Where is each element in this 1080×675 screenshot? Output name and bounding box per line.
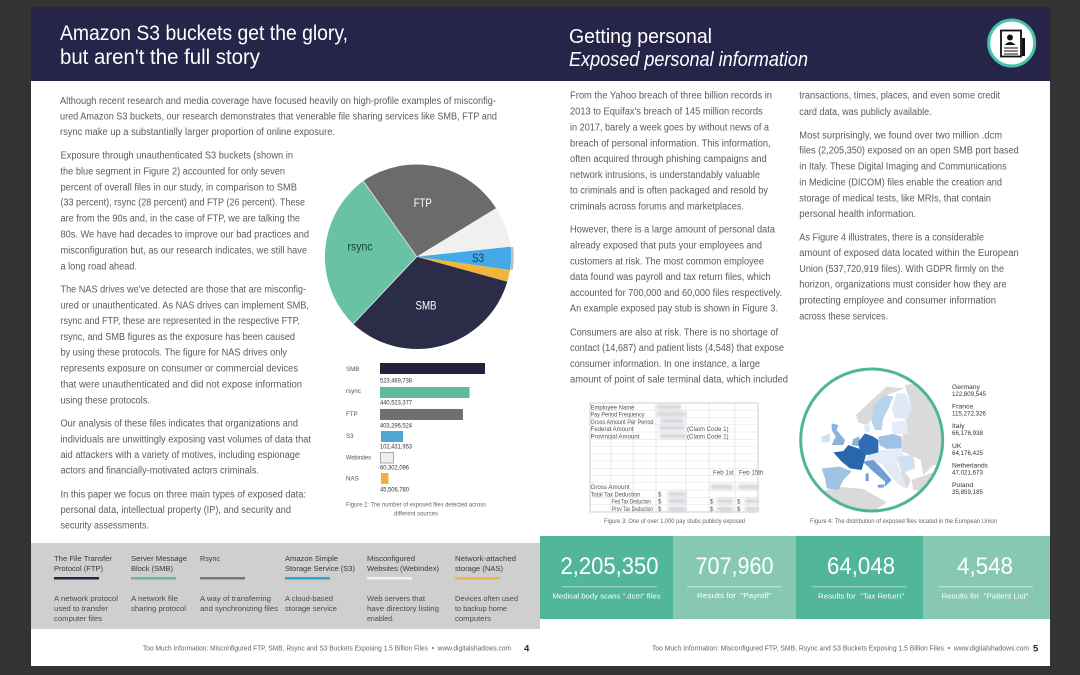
stat: tax return [796, 536, 923, 619]
figure 2 caption [346, 502, 486, 518]
glossary: SMB: Block (SMB) [131, 564, 173, 573]
right page column 2, paragraph 3: Union (537,720,919 files). With GDPR firmly on the [799, 264, 1004, 275]
paragraph: S3 exposure: are from the 90s and, in the case of FTP, we are talking the [60, 214, 301, 225]
paragraph: S3 exposure: a long road ahead. [60, 261, 137, 272]
map legend: UK [952, 443, 962, 450]
paragraph: NAS drives: using these protocols. [60, 395, 150, 406]
table labels: $ [737, 498, 741, 506]
bar chart: number of exposed files: 45,506,780 [380, 486, 410, 494]
right page column 2, paragraph 2: personal health information. [799, 209, 916, 220]
glossary: WebIndex: enabled. [367, 614, 394, 623]
table labels: $ [737, 506, 741, 513]
footer left: Too Much Information: Misconfigured FTP, SMB, Rsync and S3 Buckets Exposing 1.5 Billion Files • www.digitalshadows.com [143, 646, 511, 652]
glossary: S3: storage service [285, 604, 337, 613]
paragraph: NAS drives: that were unauthenticated and did not expose information [60, 379, 302, 390]
table labels: Feb 1st [713, 470, 734, 476]
left heading: Amazon S3 buckets get the glory, [60, 22, 348, 45]
paragraph: S3 exposure [60, 150, 309, 272]
bar chart: number of exposed files: SMB [346, 366, 359, 373]
bar chart: number of exposed files: rsync [346, 388, 361, 395]
bar chart: number of exposed files: 102,431,953 [380, 444, 413, 450]
table labels [590, 404, 764, 513]
paragraph: paper focus: personal data, intellectual property (IP), and security and [60, 505, 291, 516]
glossary: Rsync: A way of transferring [200, 594, 271, 603]
paragraph: paper focus: security assessments. [60, 521, 149, 532]
right page column 1, paragraph 2: An example exposed pay stub is shown in Figure 3. [570, 304, 778, 315]
paragraph: analysis: aid attackers with a variety of motives, including espionage [60, 450, 301, 461]
figure 4 caption: Figure 4: The distribution of exposed files located in the European Union [810, 518, 997, 525]
table labels: $ [658, 498, 662, 506]
footer right [652, 644, 1039, 654]
right page column 1, paragraph 2: accounted for 700,000 and 60,000 files respectively. [570, 288, 782, 299]
stat: tax return: 64,048 [827, 553, 895, 580]
glossary: NAS: to backup home [455, 604, 507, 613]
glossary: WebIndex: Websites (WebIndex) [367, 564, 439, 573]
glossary: S3: A cloud-based [285, 594, 333, 603]
right page column 2, paragraph 3: across these services. [799, 311, 888, 322]
right page column 2, paragraph 2: in Italy. These Digital Imaging and Communications [799, 162, 1007, 173]
glossary: WebIndex [367, 554, 439, 623]
header banner [31, 7, 1050, 81]
icon: personal dossier [989, 20, 1035, 66]
stat: medical scans: Medical body scans ".dcm" files [552, 592, 661, 600]
right page column 2, paragraph 2: Most surprisingly, we found over two million .dcm [799, 130, 1002, 141]
table labels: Feb 15th [739, 470, 764, 476]
glossary: FTP: Protocol (FTP) [54, 564, 103, 573]
figure 4: Europe map [801, 369, 950, 518]
paragraph: S3 exposure: Exposure through unauthenticated S3 buckets (shown in [60, 150, 293, 161]
paragraph: S3 exposure: (33 percent), rsync (28 percent) and FTP (26 percent). These [60, 198, 306, 209]
paragraph: paper focus: In this paper we focus on three main types of exposed data: [60, 489, 306, 500]
glossary: SMB: A network file [131, 594, 178, 603]
right page column 1, paragraph 3: amount of point of sale terminal data, which included [570, 375, 788, 386]
map legend: 47,021,673 [952, 470, 983, 476]
glossary: SMB [131, 554, 187, 613]
bar chart: number of exposed files: 403,296,524 [380, 422, 413, 430]
right page column 1, paragraph 3: contact (14,687) and patient lists (4,548) that expose [570, 343, 785, 354]
right page column 1, paragraph 3: Consumers are also at risk. There is no shortage of [570, 327, 778, 338]
table labels: $ [710, 498, 714, 506]
figure 2 caption: Figure 2: The number of exposed files detected across [346, 502, 486, 508]
pie labels: SMB [416, 300, 437, 312]
paragraph: NAS drives [60, 284, 309, 406]
pie labels [348, 198, 484, 312]
bar chart: number of exposed files: S3 [346, 433, 354, 440]
map legend: Germany [952, 384, 981, 391]
map legend: 35,859,185 [952, 489, 983, 496]
right page column 1, paragraph 1 [570, 91, 772, 213]
glossary: Rsync [200, 554, 278, 613]
right page column 2, paragraph 2: files (2,205,350) exposed on an open SMB port based [799, 146, 1019, 157]
paragraph: NAS drives: represents exposure on consumer or commercial devices [60, 364, 298, 375]
left heading [60, 22, 348, 69]
footer left: 4 [524, 644, 530, 654]
map legend: Netherlands [952, 462, 989, 470]
paragraph: NAS drives: by using these protocols. The figure for NAS drives only [60, 348, 287, 359]
right page column 2, paragraph 2 [799, 130, 1019, 220]
glossary: FTP: computer files [54, 614, 102, 623]
stat: payroll: 707,960 [696, 553, 774, 580]
right page column 2, paragraph 1: card data, was publicly available. [799, 107, 932, 118]
right page column 2, paragraph 3: protecting employee and consumer information [799, 296, 996, 307]
right heading: Exposed personal information [569, 49, 808, 71]
map legend [952, 384, 989, 496]
map legend: 122,809,545 [952, 391, 986, 398]
bar chart: number of exposed files [346, 363, 485, 494]
glossary: WebIndex: Misconfigured [367, 554, 415, 563]
map legend: 64,176,425 [952, 450, 983, 457]
glossary: FTP [54, 554, 118, 623]
stat: medical scans [540, 536, 673, 619]
right page column 1, paragraph 1: 2013 to Equifax's breach of 145 million records [570, 107, 763, 118]
stat: medical scans: 2,205,350 [560, 553, 658, 580]
stat: patient list: Results for "Patient List" [942, 592, 1029, 600]
pie chart: exposed files by source [325, 164, 512, 349]
left heading: but aren't the full story [60, 46, 260, 69]
intro paragraph: ured Amazon S3 buckets, our research demonstrates that venerable file sharing services like SMB, FTP and [60, 112, 497, 122]
pie labels: rsync [348, 242, 373, 254]
right page column 2, paragraph 2: in Medicine (DICOM) files enable the creation and [799, 177, 1002, 188]
right page column 1, paragraph 1: network intrusions, is understandably valuable [570, 170, 761, 181]
pie labels: FTP [414, 198, 432, 210]
paragraph: analysis: actors and financially-motivated actors criminals. [60, 466, 259, 477]
table labels: (Claim Code 1) [687, 433, 729, 440]
stat: payroll [673, 536, 796, 619]
map legend: Poland [952, 482, 973, 489]
glossary: S3 [285, 554, 355, 613]
glossary: WebIndex: have directory listing [367, 604, 439, 613]
glossary: S3: Storage Service (S3) [285, 564, 355, 573]
right page column 1, paragraph 2: already exposed that puts your employees and [570, 241, 762, 252]
paragraph: NAS drives: ured or unauthenticated. As NAS drives can implement SMB, [60, 300, 309, 311]
table labels: Total Tax Deduction [590, 491, 641, 498]
bar chart: number of exposed files: Webindex [346, 454, 372, 462]
table labels: $ [658, 491, 662, 498]
table labels: Employee Name [590, 404, 635, 411]
glossary: NAS: Network-attached [455, 554, 516, 563]
glossary: NAS: storage (NAS) [455, 564, 503, 573]
table labels: $ [710, 506, 714, 513]
right page column 1, paragraph 3: consumer information. In one instance, a large [570, 359, 761, 370]
right page column 1, paragraph 2: customers at risk. The most common employee [570, 256, 765, 267]
figure 2 caption: different sources [394, 510, 438, 518]
bar chart: number of exposed files: NAS [346, 476, 359, 482]
glossary: S3: Amazon Simple [285, 554, 338, 563]
paragraph: S3 exposure: the blue segment in Figure 2) accounted for only seven [60, 166, 285, 177]
map legend: 66,176,938 [952, 430, 983, 437]
right page column 1, paragraph 1: criminals across forums and marketplaces. [570, 202, 744, 213]
table labels: Fed Tax Deduction [612, 498, 651, 506]
glossary: FTP: A network protocol [54, 594, 118, 603]
right page column 1, paragraph 1: to criminals and is often packaged and resold by [570, 186, 768, 197]
paragraph: S3 exposure: percent of overall files in our study, in comparison to SMB [60, 182, 297, 193]
glossary: FTP: The File Transfer [54, 554, 112, 563]
table labels: Prov Tax Deduction [612, 506, 653, 513]
bar chart: number of exposed files: 440,523,377 [380, 400, 413, 406]
right page column 2, paragraph 3 [799, 232, 1019, 322]
right heading [569, 26, 808, 71]
glossary: NAS [455, 554, 518, 623]
table labels: Gross Amount Per Period [590, 419, 654, 426]
glossary: NAS: computers [455, 614, 491, 623]
glossary: SMB: Server Message [131, 554, 187, 563]
bar chart: number of exposed files: FTP [346, 411, 358, 418]
map legend: 115,272,326 [952, 410, 986, 418]
stat: tax return: Results for "Tax Return" [818, 592, 904, 600]
stat: payroll: Results for "Payroll" [697, 591, 771, 600]
right page column 2, paragraph 3: horizon, organizations must consider how they are [799, 280, 1007, 291]
table labels: (Claim Code 1) [687, 426, 729, 433]
glossary band [31, 543, 540, 629]
glossary: SMB: sharing protocol [131, 604, 186, 613]
glossary: NAS: Devices often used [455, 594, 518, 603]
right page column 1, paragraph 1: breach of personal information. This information, [570, 138, 771, 149]
paragraph: S3 exposure: 80s. We have had decades to improve our bad practices and [60, 229, 309, 240]
right page column 1, paragraph 1: From the Yahoo breach of three billion records in [570, 91, 772, 102]
intro paragraph: Although recent research and media coverage have focused heavily on high-profile examples of misconfig- [60, 96, 496, 107]
bar chart: number of exposed files: 60,302,096 [380, 464, 410, 472]
glossary: WebIndex: Web servers that [367, 594, 426, 603]
map legend: Italy [952, 423, 965, 430]
figure 3: pay stub table [590, 403, 764, 513]
paragraph: NAS drives: The NAS drives we've detected are those that are misconfig- [60, 284, 306, 295]
paragraph: NAS drives: rsync and FTP, these are represented in the respective FTP, [60, 316, 300, 327]
right page column 1, paragraph 2 [570, 225, 782, 315]
table labels: Federal Amount [590, 426, 634, 433]
intro paragraph [60, 96, 497, 138]
paragraph: paper focus [60, 489, 306, 532]
paragraph: S3 exposure: misconfiguration but, as our research indicates, we still have [60, 245, 308, 256]
right page column 1, paragraph 1: often acquired through phishing campaigns and [570, 154, 767, 165]
table labels: $ [658, 506, 662, 513]
map legend: France [952, 404, 973, 410]
right page column 1, paragraph 1: in 2017, barely a week goes by without news of a [570, 123, 770, 134]
footer right: 5 [1033, 644, 1039, 654]
pie labels: S3 [472, 253, 484, 265]
right page column 2, paragraph 3: amount of exposed data located within the European [799, 248, 1019, 259]
right page column 2, paragraph 1 [799, 91, 1000, 118]
stat: patient list [923, 536, 1050, 619]
glossary: Rsync: and synchronizing files [200, 604, 278, 613]
right page column 1, paragraph 2: data found was payroll and tax return files, which [570, 272, 771, 283]
table labels: Pay Period Frequency [590, 412, 645, 418]
glossary: FTP: used to transfer [54, 604, 108, 613]
bar chart: number of exposed files: 523,469,738 [380, 378, 413, 384]
paragraph: analysis: individuals are unwittingly exposing vast volumes of data that [60, 434, 311, 445]
paragraph: NAS drives: rsync, and SMB figures as the exposure has been caused [60, 332, 295, 343]
paragraph: analysis: Our analysis of these files indicates that organizations and [60, 419, 298, 430]
right page column 2, paragraph 3: As Figure 4 illustrates, there is a considerable [799, 232, 985, 243]
intro paragraph: rsync make up a substantially larger proportion of online exposure. [60, 127, 335, 138]
paragraph: analysis [60, 419, 311, 477]
right page column 1, paragraph 3 [570, 327, 788, 386]
figure 3 caption: Figure 3: One of over 1,000 pay stubs publicly exposed [604, 518, 745, 525]
footer left [143, 644, 530, 654]
right page column 2, paragraph 1: transactions, times, places, and even some credit [799, 91, 1000, 102]
footer right: Too Much Information: Misconfigured FTP, SMB, Rsync and S3 Buckets Exposing 1.5 Billion Files • www.digitalshadows.com [652, 646, 1029, 652]
right page column 2, paragraph 2: storage of medical tests, like MRIs, that contain [799, 193, 991, 204]
table labels: Gross Amount [590, 484, 630, 491]
blurred values [657, 405, 758, 511]
right page column 1, paragraph 2: However, there is a large amount of personal data [570, 225, 776, 236]
table labels: Provincial Amount [590, 433, 640, 440]
stat: patient list: 4,548 [957, 553, 1013, 580]
right heading: Getting personal [569, 26, 712, 48]
glossary: Rsync: Rsync [200, 554, 220, 563]
